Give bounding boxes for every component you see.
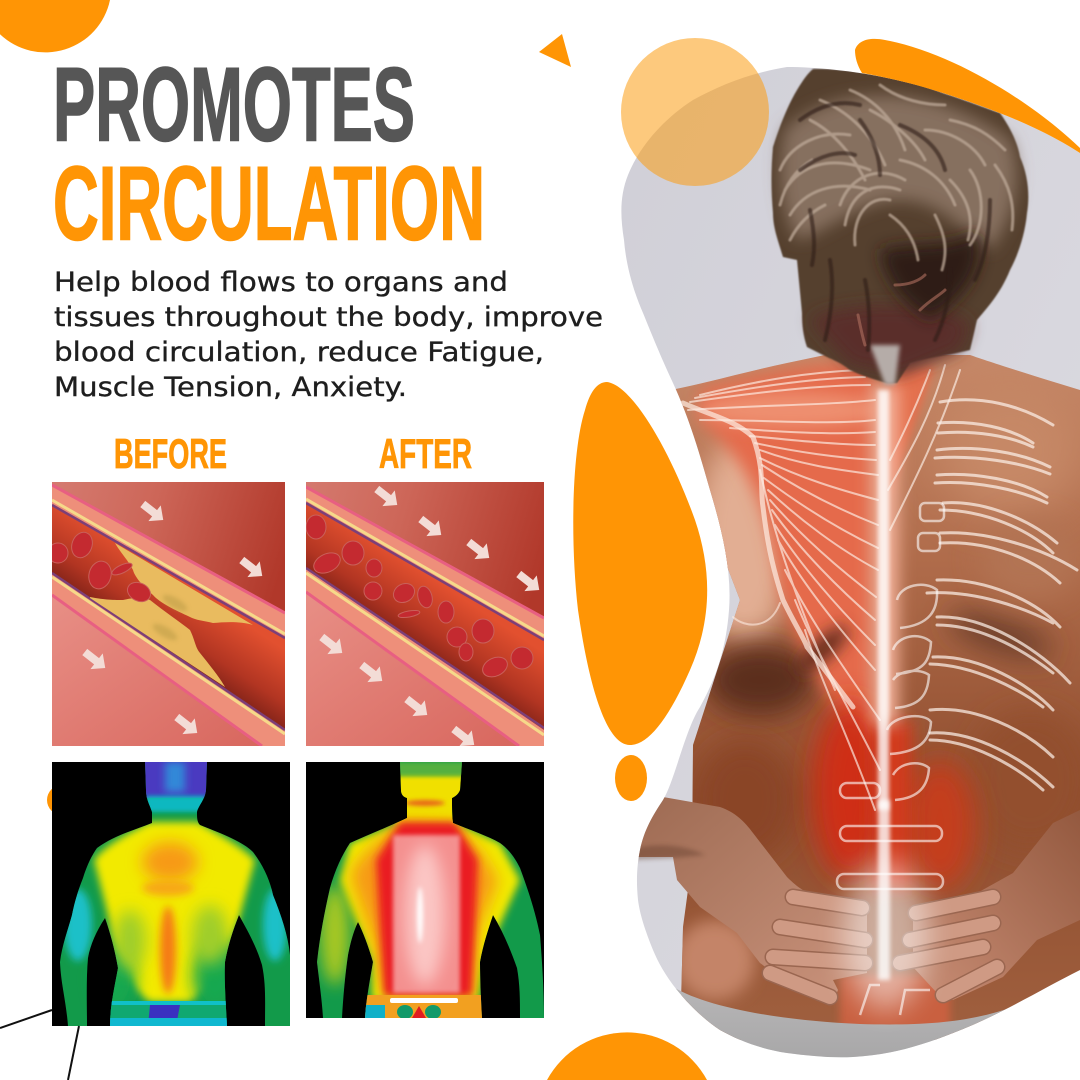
body text: Help blood flows to organs and <box>54 267 508 298</box>
decorative orange dot <box>615 755 647 801</box>
label: after: AFTER <box>379 430 472 477</box>
lower waist <box>675 920 755 1000</box>
decorative triangle <box>539 34 571 67</box>
waistband <box>676 988 1005 1058</box>
waistband <box>110 1001 227 1024</box>
left forearm and hand <box>630 797 867 1002</box>
upper wall <box>52 485 285 640</box>
rib lines right <box>927 400 1077 790</box>
body text: tissues throughout the body, improve <box>54 302 603 333</box>
spine glow upper <box>872 385 898 725</box>
thermal image: before <box>52 762 290 1026</box>
hair <box>145 762 207 798</box>
right forearm and hand <box>913 810 1080 1000</box>
waist <box>365 995 483 1018</box>
decorative circle bottom <box>547 1032 707 1080</box>
label: before: BEFORE <box>114 430 227 477</box>
body text: Muscle Tension, Anxiety. <box>54 372 407 403</box>
body text <box>54 267 603 403</box>
decorative orange drop <box>573 382 707 745</box>
head <box>395 762 467 776</box>
decorative translucent circle over photo <box>621 38 769 186</box>
muscle fibers left <box>688 365 960 810</box>
hair highlights <box>780 85 1013 270</box>
tonal areas <box>695 435 795 645</box>
torso <box>340 820 520 1000</box>
right fingers <box>900 897 997 995</box>
red muscle fan <box>700 364 875 760</box>
lower wall <box>52 573 285 746</box>
body text: blood circulation, reduce Fatigue, <box>54 337 544 368</box>
photo: man's back with highlighted muscles and spine <box>610 60 1080 1080</box>
left fingers <box>770 897 865 997</box>
thermal image: after <box>306 762 544 1019</box>
title <box>53 46 485 262</box>
torso yellow <box>94 822 255 1002</box>
spine and vertebrae <box>837 390 944 1015</box>
title: PROMOTES <box>53 46 415 164</box>
decorative circle: top left <box>0 0 110 52</box>
torso <box>660 350 1080 1040</box>
arms <box>64 889 92 961</box>
scapula outline <box>683 403 853 707</box>
arms with yellow patches <box>320 885 350 985</box>
decorative black lines bottom left <box>0 1010 79 1080</box>
plaque <box>115 543 253 625</box>
hair <box>772 69 1028 385</box>
arrows <box>79 496 268 741</box>
lumbar red glow <box>812 700 888 880</box>
artery illustration: after <box>306 481 545 753</box>
title: CIRCULATION <box>53 146 485 262</box>
hands and forearms <box>630 797 1080 1002</box>
decorative circle behind thermal image <box>47 785 77 815</box>
decorative orange swoosh top right <box>855 39 1080 153</box>
warm orange cross <box>142 842 198 882</box>
lumen <box>52 505 285 730</box>
artery illustration: before <box>48 482 285 746</box>
